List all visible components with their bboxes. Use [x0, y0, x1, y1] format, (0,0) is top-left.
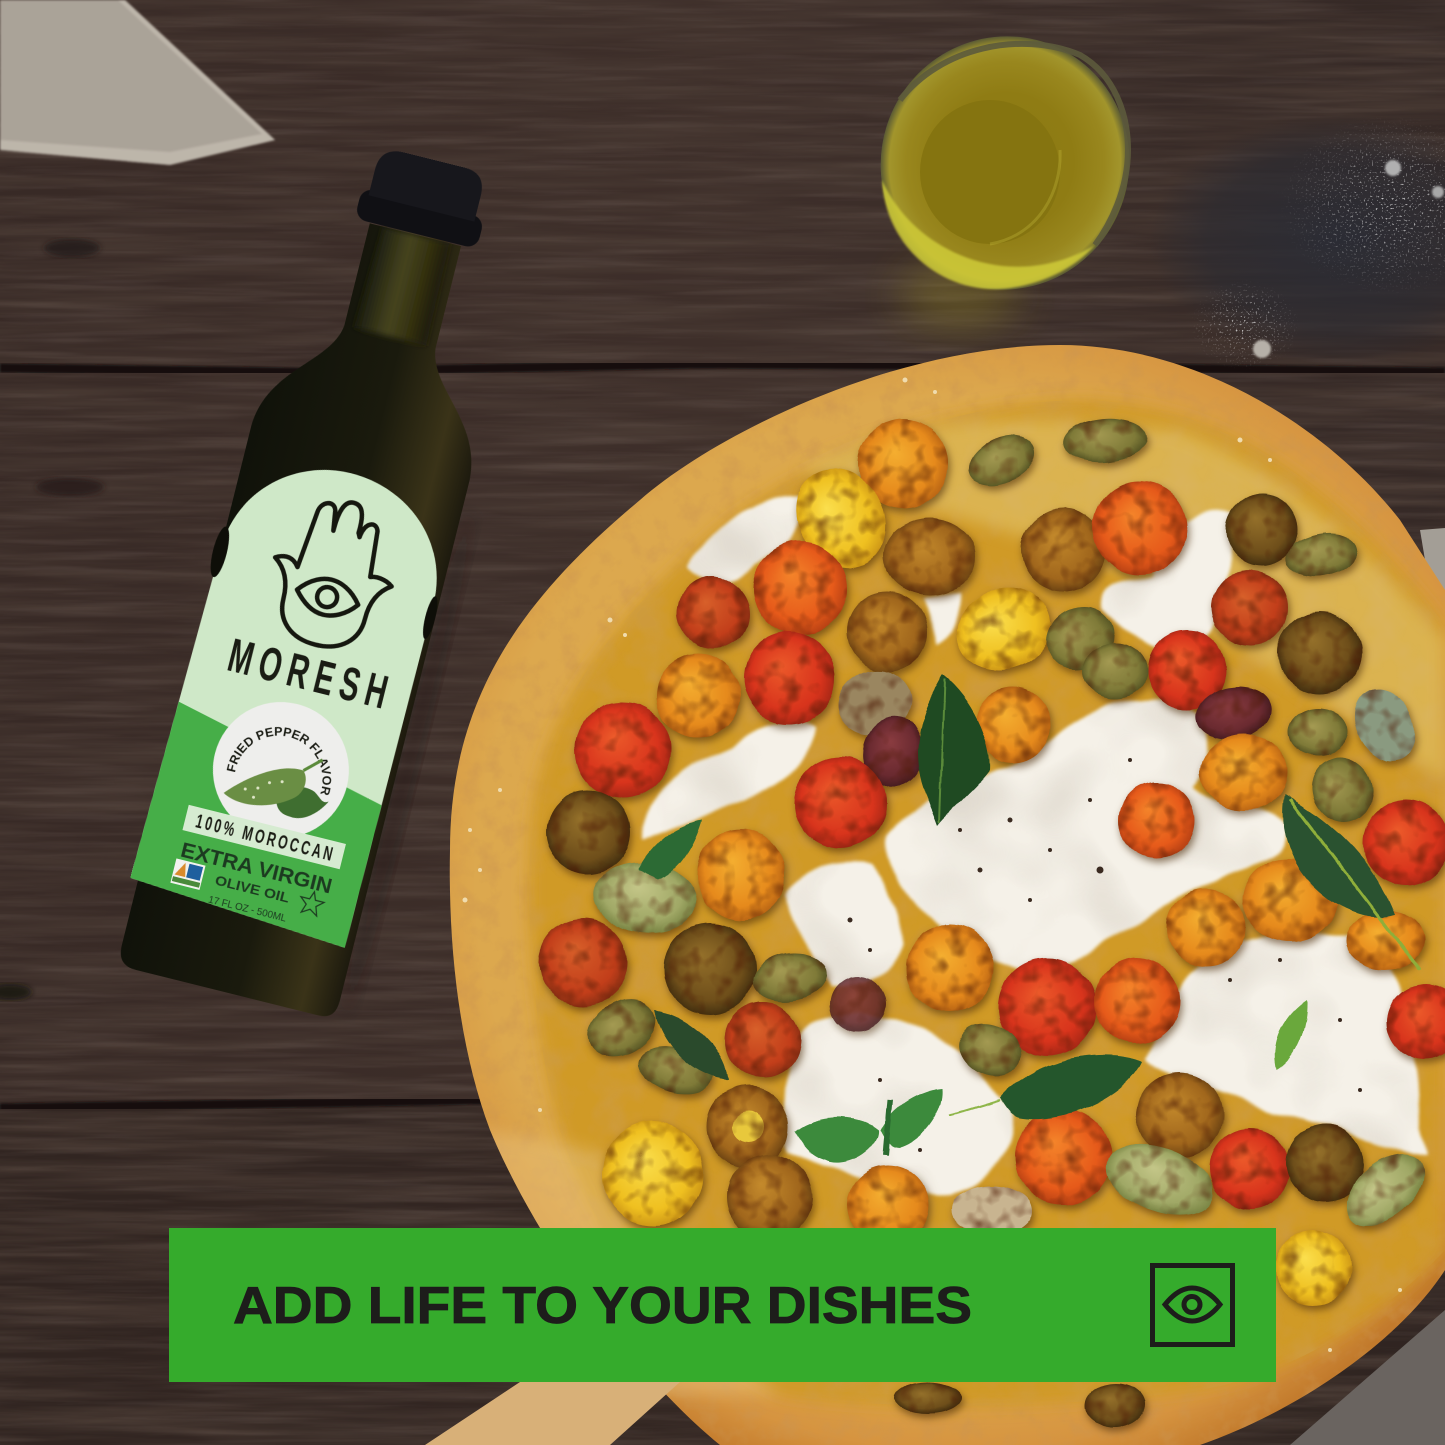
crust sesame specks [462, 378, 1402, 1352]
pizza sauce and cheese [480, 400, 1445, 1406]
olive oil bottle [120, 151, 482, 1016]
bottle label [130, 470, 438, 948]
label side notches [205, 525, 444, 640]
pizza [450, 345, 1445, 1445]
wooden pizza peel handle [425, 1382, 680, 1445]
green banner [169, 1228, 1276, 1382]
bottle label: 17 FL OZ - 500ML [207, 894, 288, 925]
flavor text: FRIED PEPPER FLAVOR [226, 726, 332, 796]
star emblem [297, 889, 326, 917]
bottle neck highlight [354, 226, 451, 346]
basil leaves [638, 675, 1420, 1163]
bottle label: OLIVE OIL [214, 872, 292, 906]
origin strip: 100% MOROCCAN [193, 811, 337, 866]
mozzarella blobs [640, 497, 1425, 1195]
label green lower band [130, 702, 382, 948]
pizza crust [450, 345, 1445, 1445]
non-GMO badge [170, 858, 206, 890]
icon: eye in square [1152, 1266, 1232, 1344]
bottle glass body [117, 207, 524, 1020]
glass of olive oil [845, 1, 1165, 330]
tomatoes and olives [539, 414, 1445, 1427]
napkin top left [0, 0, 275, 165]
product type text: EXTRA VIRGIN [178, 839, 334, 898]
cloth bottom right [1290, 528, 1445, 1445]
banner headline: ADD LIFE TO YOUR DISHES [233, 1277, 972, 1335]
flavor badge [212, 702, 349, 834]
flour dusting [1150, 115, 1445, 370]
peppers [222, 739, 338, 825]
brand name: MORESH [223, 630, 399, 721]
hamsa hand logo [257, 488, 409, 659]
bottle collar [355, 187, 485, 249]
black pepper specks [848, 758, 1362, 1152]
bottle cap [369, 147, 486, 222]
